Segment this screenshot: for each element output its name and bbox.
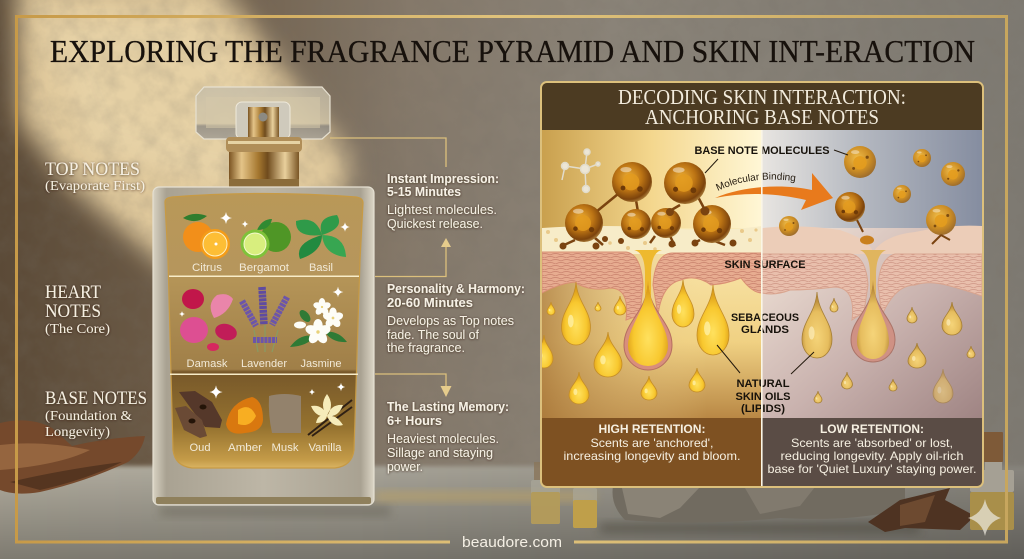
heart notes label: NOTES xyxy=(45,301,101,322)
skin surface: right raised layer xyxy=(762,226,982,254)
text: base notes timing xyxy=(387,400,509,474)
top notes label: TOP NOTES xyxy=(45,159,140,180)
decorative small vial center xyxy=(573,488,597,528)
retention box: high xyxy=(542,418,762,486)
glass base rim xyxy=(156,497,371,504)
bottle cap xyxy=(196,87,330,139)
oil drops left side xyxy=(535,280,729,404)
label: sebaceous glands xyxy=(731,314,799,333)
text: damask: Damask xyxy=(186,358,228,370)
icon: corner sparkle xyxy=(968,499,1001,536)
glass body xyxy=(153,187,374,505)
icon: lavender xyxy=(242,287,287,352)
gland: right large oil drop xyxy=(851,280,895,362)
icon: damask rose petals xyxy=(180,289,239,351)
text: top notes timing xyxy=(387,172,499,231)
heart notes label xyxy=(45,282,110,337)
gland: left large oil drop xyxy=(624,280,672,370)
icon: vanilla xyxy=(308,394,352,436)
text: heart notes timing xyxy=(387,282,525,355)
label: natural skin oils: SKIN OILS xyxy=(736,391,790,403)
text: heart notes timing: the fragrance. xyxy=(387,341,465,355)
icon: small grey molecule diagram xyxy=(562,149,600,192)
retention box: low xyxy=(762,418,982,486)
oil drops right side xyxy=(802,292,975,403)
arrow: base connector pointing down xyxy=(375,374,452,397)
retention box: low: reducing longevity. Apply oil-rich xyxy=(780,449,964,463)
icon: musk xyxy=(269,394,301,433)
perfume liquid xyxy=(165,194,363,468)
panel header band xyxy=(542,83,982,130)
sparkles base tier xyxy=(209,383,345,399)
panel title xyxy=(618,85,906,129)
text: base notes timing: Heaviest molecules. xyxy=(387,432,499,446)
right scene background xyxy=(762,130,982,418)
left scene background xyxy=(542,130,762,418)
panel center divider xyxy=(761,130,763,486)
icon: citrus xyxy=(183,214,230,259)
tier divider top-heart xyxy=(169,276,359,277)
label: natural skin oils xyxy=(736,378,790,415)
decorative wood: left oud pieces xyxy=(0,420,145,494)
icon: bergamot xyxy=(240,219,291,258)
retention box: high: Scents are 'anchored', xyxy=(590,436,714,450)
arrow: heart connector pointing up xyxy=(375,238,451,276)
bound molecules cluster xyxy=(560,162,736,250)
retention box: low: base for 'Quiet Luxury' staying power. xyxy=(768,462,976,476)
decorative small vial left xyxy=(531,462,560,524)
text: heart notes timing: fade. The soul of xyxy=(387,328,480,342)
retention box: high: increasing longevity and bloom. xyxy=(564,449,740,463)
label: sebaceous glands: GLANDS xyxy=(741,324,789,336)
text: top notes timing: Instant Impression: xyxy=(387,172,499,186)
title: EXPLORING THE FRAGRANCE PYRAMID AND SKIN INT-ERACTION xyxy=(50,33,975,69)
gland neck right xyxy=(860,250,886,300)
text: lavender: Lavender xyxy=(241,358,287,370)
left column: note tier labels xyxy=(45,159,147,440)
icon: amber xyxy=(226,397,263,434)
panel frame xyxy=(541,82,983,487)
skin layer: left dermis xyxy=(542,252,762,320)
decorative wood: right oud pieces xyxy=(868,488,975,532)
panel clipped illustration xyxy=(542,130,982,418)
icon: jasmine xyxy=(290,298,347,347)
text: oud: Oud xyxy=(190,442,210,454)
footer: website: beaudore.com xyxy=(462,535,562,551)
label: natural skin oils: (LIPIDS) xyxy=(741,403,785,415)
text: base notes timing: The Lasting Memory: xyxy=(387,400,509,414)
text: base notes timing: Sillage and staying xyxy=(387,446,493,460)
label: molecular binding: Molecular Binding xyxy=(716,172,796,191)
gland neck left xyxy=(634,250,662,300)
label: base note molecules: BASE NOTE MOLECULES xyxy=(694,145,830,157)
decorative rock under panel xyxy=(612,486,905,523)
text: jasmine: Jasmine xyxy=(300,358,342,370)
icon: basil xyxy=(296,215,346,259)
text: basil: Basil xyxy=(309,262,333,274)
text: top notes timing: Quickest release. xyxy=(387,217,483,231)
text: top notes timing: 5-15 Minutes xyxy=(387,185,461,199)
sparkles top tier xyxy=(220,212,350,232)
text: base notes timing: power. xyxy=(387,460,423,474)
perfume bottle xyxy=(153,87,374,505)
base notes label xyxy=(45,388,147,440)
top notes label: (Evaporate First) xyxy=(45,179,145,194)
panel title: DECODING SKIN INTERACTION: xyxy=(618,85,906,109)
sparkles heart tier xyxy=(179,287,343,317)
decorative cork bottle right xyxy=(970,432,1014,530)
top notes label xyxy=(45,159,145,194)
text: heart notes timing: Personality & Harmony: xyxy=(387,282,525,296)
heart notes label: HEART xyxy=(45,282,101,303)
panel title: ANCHORING BASE NOTES xyxy=(645,105,879,129)
text: bergamot: Bergamot xyxy=(239,262,289,274)
arrow: molecular binding xyxy=(715,173,833,210)
text: amber: Amber xyxy=(228,442,262,454)
base notes label: (Foundation & xyxy=(45,409,132,424)
skin surface: left foam layer xyxy=(542,226,762,254)
retention box: high: HIGH RETENTION: xyxy=(598,422,706,436)
skin layer: right dermis xyxy=(762,254,982,320)
label: sebaceous glands: SEBACEOUS xyxy=(731,312,799,324)
text: musk: Musk xyxy=(272,442,299,454)
label: skin surface: SKIN SURFACE xyxy=(724,259,806,271)
heart notes label: (The Core) xyxy=(45,322,110,337)
icon: oud wood xyxy=(175,391,222,438)
leader lines xyxy=(705,150,848,374)
tier divider heart-base xyxy=(170,374,358,375)
text: citrus: Citrus xyxy=(192,262,223,274)
text: top notes timing: Lightest molecules. xyxy=(387,203,497,217)
free molecules right xyxy=(779,146,965,244)
label: natural skin oils: NATURAL xyxy=(736,378,790,390)
retention box: low: Scents are 'absorbed' or lost, xyxy=(791,436,953,450)
retention box: low: LOW RETENTION: xyxy=(820,422,924,436)
panel: decoding skin interaction xyxy=(540,81,984,488)
bottle collar xyxy=(226,137,302,187)
base notes label: BASE NOTES xyxy=(45,388,147,409)
right column: timing descriptions xyxy=(387,172,525,474)
arrow: top connector line xyxy=(330,138,446,167)
text: heart notes timing: Develops as Top notes xyxy=(387,314,514,328)
text: base notes timing: 6+ Hours xyxy=(387,414,442,428)
base notes label: Longevity) xyxy=(45,425,110,440)
text: heart notes timing: 20-60 Minutes xyxy=(387,296,473,310)
text: vanilla: Vanilla xyxy=(308,442,342,454)
